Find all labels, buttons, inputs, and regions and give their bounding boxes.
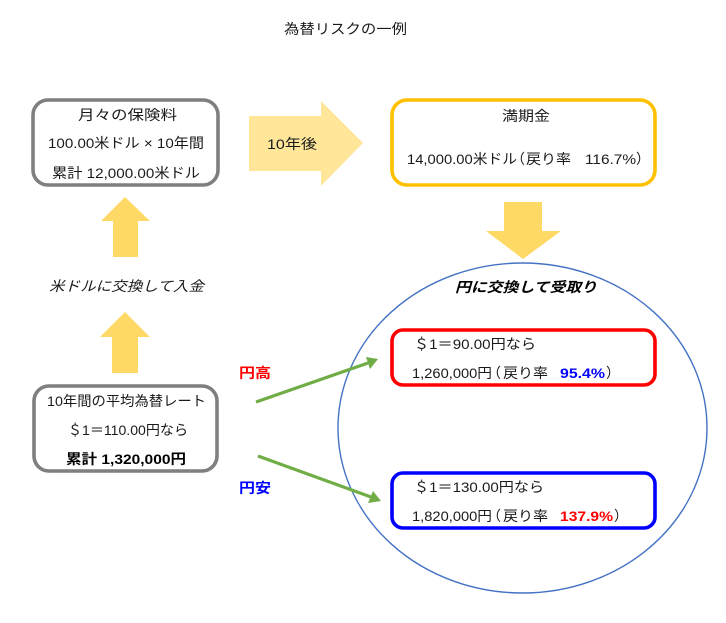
arrow: up to exchange <box>100 312 150 373</box>
panel: weak yen case: ＄1＝130.00円なら <box>414 479 544 495</box>
arrow: ten years later <box>249 101 363 186</box>
arrow: ten years later: 10年後 <box>267 136 317 152</box>
panel: monthly premium: 累計 12,000.00米ドル <box>52 165 200 181</box>
panel: weak yen case: 1,820,000円 <box>412 508 492 524</box>
arrow: up to premium <box>101 197 150 257</box>
panel: weak yen case: ） <box>614 508 628 524</box>
panel: average exchange rate: 累計 1,320,000円 <box>66 451 186 467</box>
panel: monthly premium: 100.00米ドル × 10年間 <box>48 135 204 151</box>
panel: weak yen case: 戻り率 <box>503 508 548 524</box>
panel: average exchange rate <box>34 386 217 471</box>
panel: strong yen case: （ <box>487 365 501 381</box>
panel: monthly premium <box>33 100 218 185</box>
circle: yen conversion: 円に交換して受取り <box>455 279 597 295</box>
arrow: to strong yen <box>256 357 378 402</box>
panel: strong yen case <box>392 330 655 385</box>
panel: strong yen case: 戻り率 <box>503 365 548 381</box>
panel: strong yen case: 95.4% <box>560 365 606 381</box>
panel: average exchange rate: 10年間の平均為替レート <box>47 393 206 409</box>
arrow: to weak yen <box>258 456 381 503</box>
circle: yen conversion <box>338 263 707 593</box>
panel: maturity payout: 戻り率 <box>526 151 571 167</box>
panel: strong yen case: 1,260,000円 <box>412 365 492 381</box>
panel: maturity payout: （ <box>511 151 525 167</box>
label: strong yen: 円高 <box>239 365 271 381</box>
panel: average exchange rate: ＄1＝110.00円なら <box>68 422 188 438</box>
panel: weak yen case <box>392 473 655 528</box>
panel: weak yen case: 137.9% <box>560 508 614 524</box>
caption: exchange to dollars: 米ドルに交換して入金 <box>49 278 206 294</box>
label: weak yen: 円安 <box>239 480 271 496</box>
panel: strong yen case: ） <box>606 365 620 381</box>
panel: maturity payout: 116.7% <box>585 151 636 167</box>
panel: monthly premium: 月々の保険料 <box>78 107 177 123</box>
arrow: down to yen conversion <box>486 202 561 259</box>
panel: maturity payout: 14,000.00米ドル <box>407 151 517 167</box>
panel: weak yen case: （ <box>487 508 501 524</box>
panel: maturity payout: ） <box>636 151 650 167</box>
panel: maturity payout <box>392 100 655 185</box>
title: 為替リスクの一例 <box>284 21 407 37</box>
panel: strong yen case: ＄1＝90.00円なら <box>414 336 536 352</box>
panel: maturity payout: 満期金 <box>502 108 550 124</box>
